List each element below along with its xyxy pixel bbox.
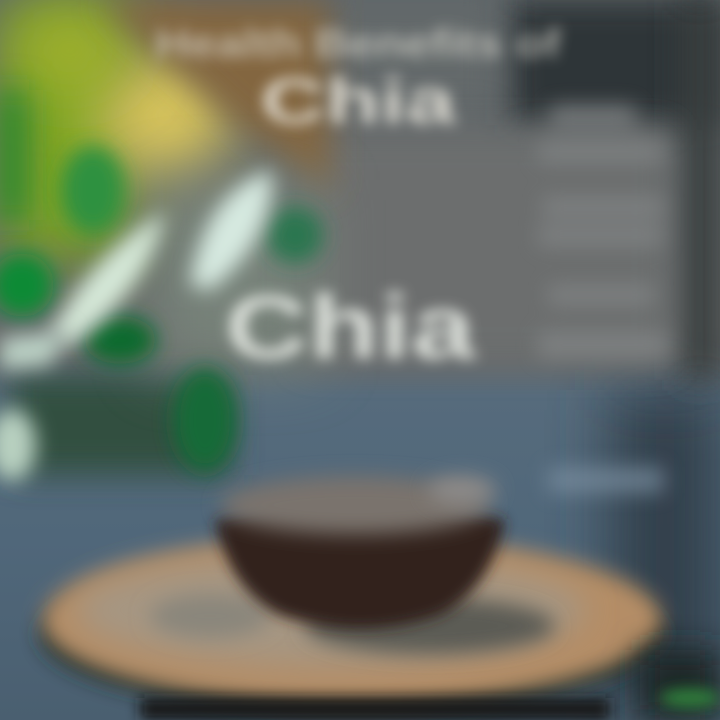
small green leaf, bottom right: [640, 650, 720, 720]
bowl body: [215, 502, 505, 628]
title: Health Benefits of Chia: [156, 22, 561, 137]
side column text blocks: [538, 105, 668, 493]
plate: [40, 536, 664, 712]
base shadow: [140, 698, 610, 720]
large label: Chia: Chia: [225, 278, 476, 378]
seeds: [220, 476, 490, 534]
heading line: Health Benefits of: [156, 22, 561, 66]
leaves: [0, 146, 323, 481]
background: green and yellow foliage glow: [0, 0, 330, 260]
heading word: Chia: [260, 65, 456, 137]
bowl of chia seeds: [215, 476, 505, 628]
